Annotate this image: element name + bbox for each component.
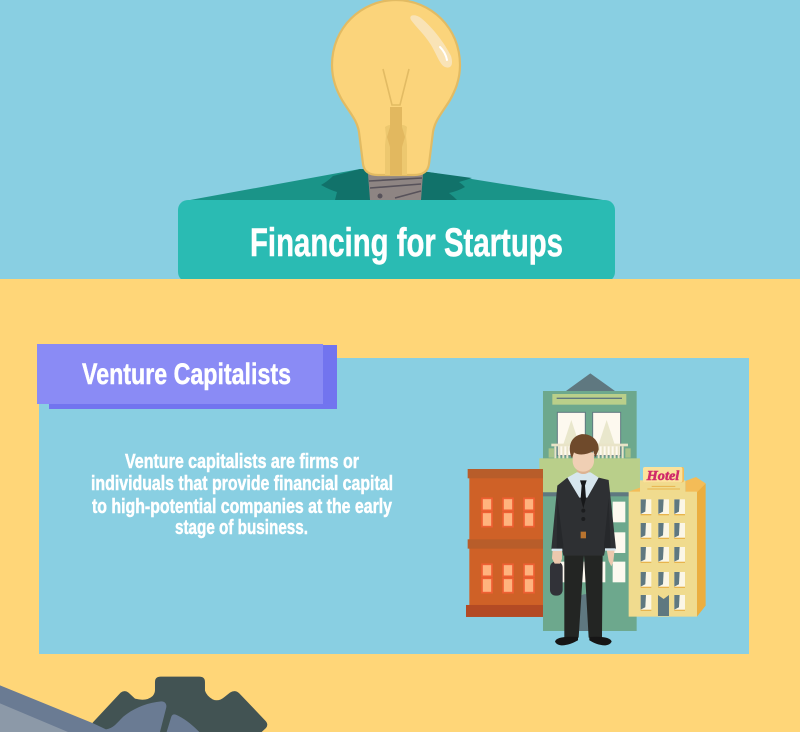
icon: light bulb xyxy=(332,0,460,200)
heading: Venture Capitalists xyxy=(82,358,291,391)
green building xyxy=(539,373,640,631)
hotel building xyxy=(629,467,706,617)
description text xyxy=(91,451,393,539)
gear xyxy=(93,677,267,732)
description text: to high-potential companies at the early xyxy=(92,496,393,518)
orange building xyxy=(466,469,543,617)
title: Financing for Startups xyxy=(250,221,563,265)
description text: stage of business. xyxy=(175,517,308,539)
briefcase xyxy=(550,557,563,596)
description text: Venture capitalists are firms or xyxy=(125,451,359,473)
illustration: businessman and buildings xyxy=(466,373,706,645)
illustration: gear and wedge, bottom left xyxy=(0,677,267,732)
description text: individuals that provide financial capital xyxy=(91,473,393,495)
yellow background section xyxy=(0,279,800,732)
title banner xyxy=(178,200,615,282)
hotel sign: Hotel xyxy=(646,469,679,484)
wedge xyxy=(0,685,166,732)
hill behind title banner xyxy=(190,169,603,200)
heading ribbon: venture capitalists xyxy=(37,344,337,409)
panel: venture capitalists xyxy=(39,358,749,654)
businessman xyxy=(550,434,616,645)
sky background xyxy=(0,0,800,279)
